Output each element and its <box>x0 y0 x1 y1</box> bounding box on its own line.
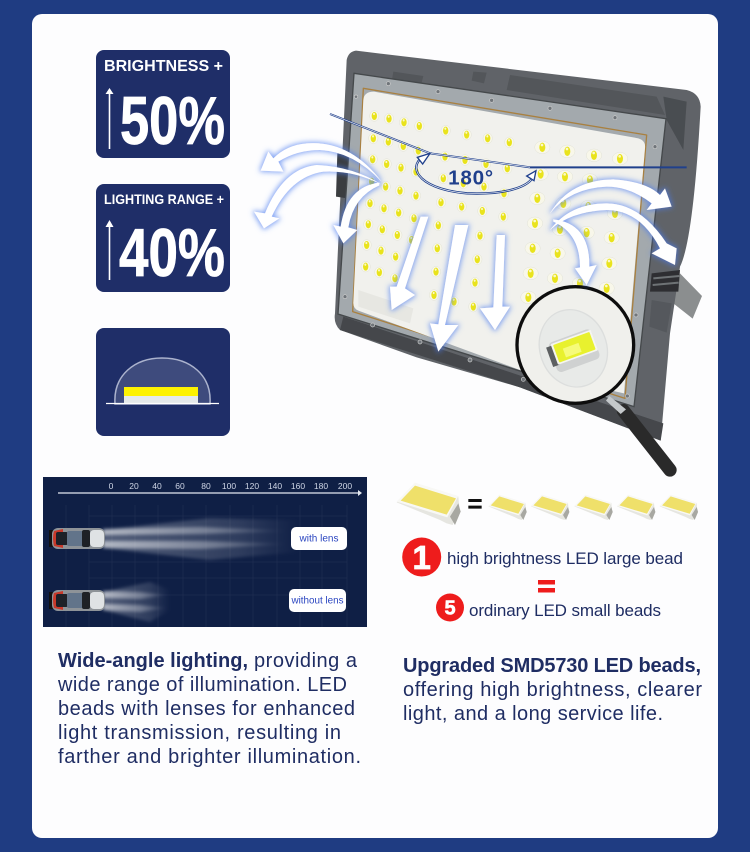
stat card: lighting range +40% <box>96 184 230 292</box>
stat card: brightness +50% <box>96 50 230 159</box>
LED beads right block <box>521 141 628 304</box>
distance axis: 60 <box>175 481 185 491</box>
screws <box>343 82 657 398</box>
stat card: lighting range +40%: 40% <box>119 215 225 291</box>
arrows: left light spread <box>254 143 382 243</box>
badge and label: five small beads: 5 <box>444 598 456 620</box>
text block: wide-angle lighting: light transmission, resulting in <box>58 722 341 744</box>
car without lens <box>49 590 105 611</box>
magnifier lens with enlarged LED <box>517 287 634 403</box>
distance axis <box>58 481 362 496</box>
text block: wide-angle lighting: farther and brighter illumination. <box>58 746 361 768</box>
magnifier handle <box>623 411 670 470</box>
text block: wide-angle lighting <box>57 650 361 768</box>
distance axis: 0 <box>109 481 114 491</box>
chart grid <box>66 505 347 627</box>
text block: wide-angle lighting: beads with lenses for enhanced <box>58 698 355 720</box>
distance axis: 100 <box>222 481 236 491</box>
badge and label: one large bead: high brightness LED large bead <box>447 549 683 568</box>
car with lens <box>49 528 105 549</box>
badge and label: five small beads <box>436 594 661 622</box>
icon card: LED under dome lens <box>96 328 230 436</box>
text block: upgraded SMD5730 beads <box>403 655 702 725</box>
label: without lens: without lens <box>291 596 344 606</box>
distance axis: 120 <box>245 481 259 491</box>
label: with lens <box>291 527 347 550</box>
distance axis: 140 <box>268 481 282 491</box>
headlight beams without lens <box>103 582 170 622</box>
text block: wide-angle lighting: wide range of illumination. LED <box>57 674 347 696</box>
headlight beams with lens <box>103 518 300 560</box>
label: without lens <box>289 589 346 612</box>
LED beads left block <box>361 111 424 284</box>
arrows: downward light spread <box>390 217 510 352</box>
LED panel <box>353 92 645 393</box>
distance axis: 200 <box>338 481 352 491</box>
text block: wide-angle lighting: providing a <box>254 650 358 672</box>
distance axis: 160 <box>291 481 305 491</box>
callout: 180 degree angle marker <box>330 114 687 194</box>
text block: wide-angle lighting: Wide-angle lighting, <box>58 650 248 672</box>
floodlight product photo <box>335 51 702 470</box>
distance axis: 180 <box>314 481 328 491</box>
badge and label: one large bead <box>402 538 683 576</box>
distance axis: 40 <box>152 481 162 491</box>
stat card: brightness +50%: BRIGHTNESS + <box>104 58 223 75</box>
LED beads middle block <box>429 125 514 312</box>
clear cover frame <box>338 73 666 407</box>
text block: upgraded SMD5730 beads: offering high brightness, clearer <box>403 679 702 701</box>
arrows: right light spread <box>550 179 677 285</box>
callout: 180 degree angle marker: 180° <box>448 166 493 189</box>
lamp housing <box>335 51 701 441</box>
kickstand <box>673 273 702 319</box>
stat card: brightness +50%: 50% <box>120 83 225 159</box>
stat card: lighting range +40%: LIGHTING RANGE + <box>104 191 224 207</box>
badge and label: one large bead: 1 <box>413 539 431 576</box>
distance axis: 80 <box>201 481 211 491</box>
text block: upgraded SMD5730 beads: Upgraded SMD5730 LED beads, <box>403 655 701 677</box>
red equals sign <box>538 580 555 592</box>
label: with lens: with lens <box>299 534 338 544</box>
LED bead comparison: one large equals five small <box>397 483 698 525</box>
distance axis: 20 <box>129 481 139 491</box>
text block: upgraded SMD5730 beads: light, and a long service life. <box>403 703 663 725</box>
badge and label: five small beads: ordinary LED small beads <box>469 601 661 620</box>
gasket <box>353 88 647 398</box>
left side clip <box>336 153 348 198</box>
chart: illumination distance with and without lens <box>43 477 367 627</box>
